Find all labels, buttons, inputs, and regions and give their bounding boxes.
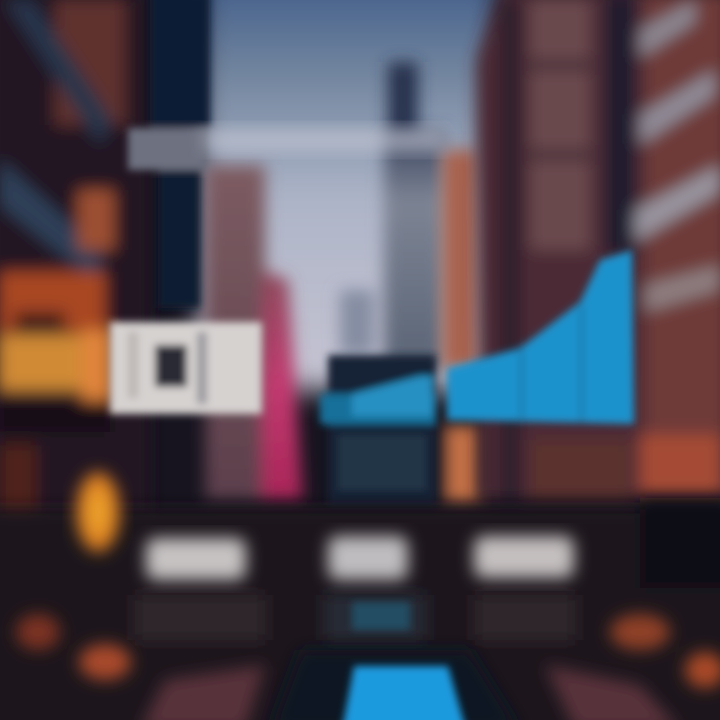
orange facade beside tower bbox=[442, 150, 480, 503]
dark vertical pillar bbox=[128, 0, 210, 308]
right brick buildings bbox=[476, 0, 720, 500]
white chart panel bbox=[110, 322, 262, 414]
blue area chart bbox=[447, 250, 634, 424]
pale card right bbox=[474, 536, 574, 578]
street lights and road bbox=[16, 614, 720, 720]
left building bbox=[0, 0, 150, 525]
sky bbox=[200, 0, 500, 390]
glowing orange sign bbox=[76, 472, 120, 552]
dark blue screen panel bbox=[320, 355, 436, 505]
central grey tower bbox=[340, 62, 444, 370]
lower dark band bbox=[0, 498, 720, 720]
pale card left bbox=[146, 538, 246, 580]
blue glowing road panel bbox=[342, 602, 466, 720]
pale horizontal band bbox=[205, 128, 445, 152]
pale card centre bbox=[328, 536, 408, 580]
mid-left pink building bbox=[205, 165, 303, 500]
